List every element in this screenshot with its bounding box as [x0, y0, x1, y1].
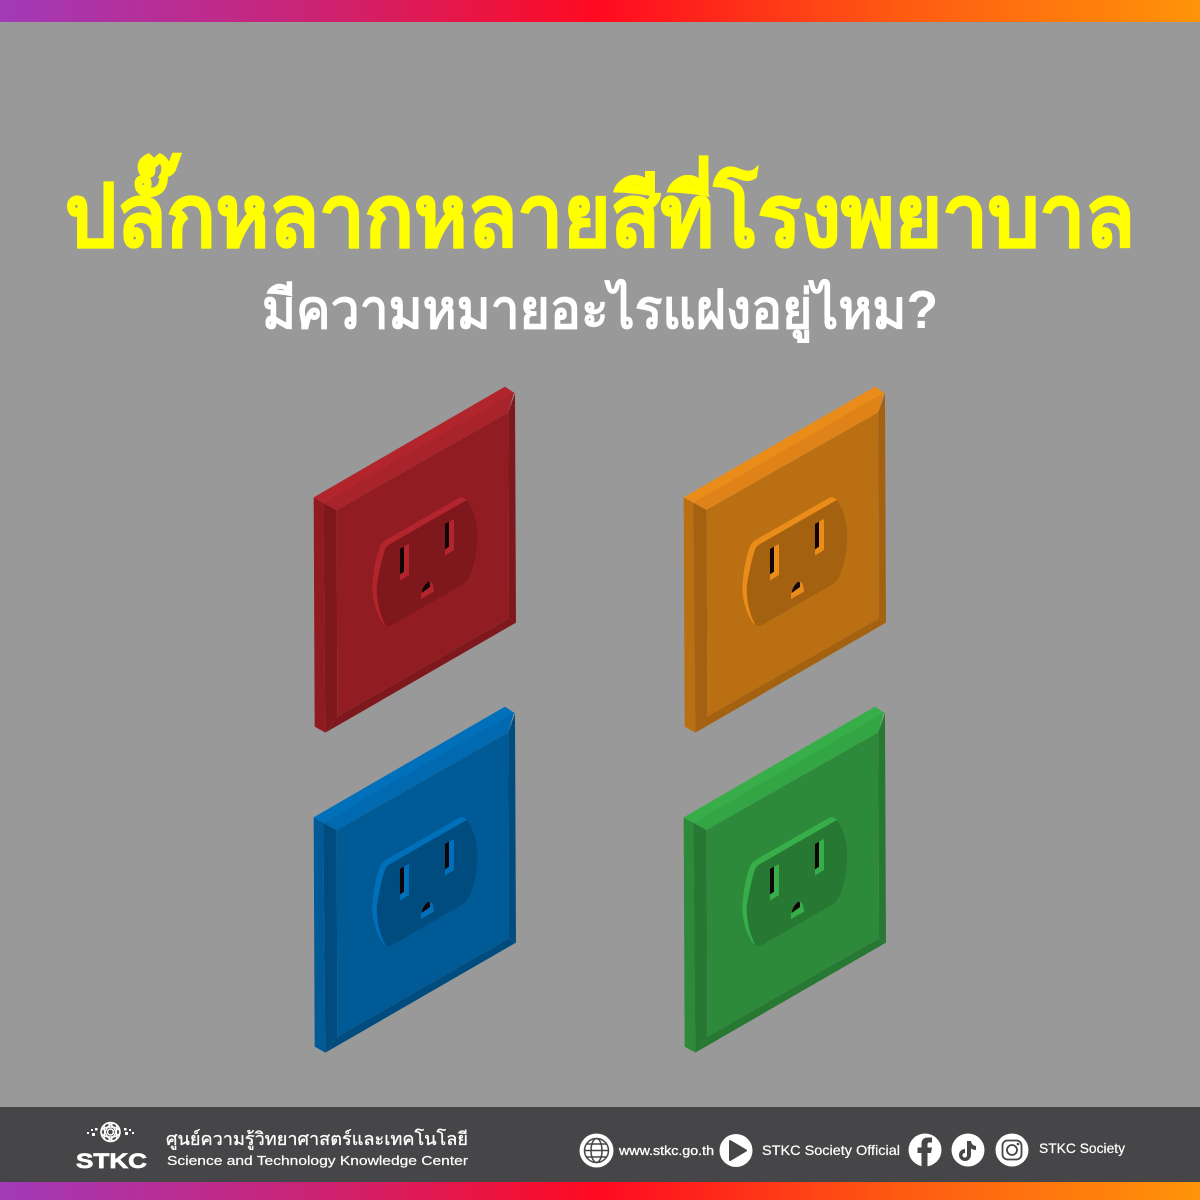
title: ปลั๊กหลากหลายสีที่โรงพยาบาล — [65, 153, 1135, 265]
icon: instagram — [996, 1134, 1028, 1166]
footer organisation name Thai: ศูนย์ความรู้วิทยาศาสตร์และเทคโนโลยี — [166, 1128, 468, 1150]
icon: tiktok — [952, 1134, 984, 1166]
bottom gradient bar — [0, 1182, 1200, 1200]
footer bar — [0, 1107, 1200, 1182]
website text: www.stkc.go.th — [618, 1143, 714, 1158]
subtitle: มีความหมายอะไรแฝงอยู่ไหม? — [262, 278, 938, 343]
top gradient bar — [0, 0, 1200, 22]
footer organisation name English: Science and Technology Knowledge Center — [167, 1153, 469, 1168]
STKC logo: STKC — [76, 1150, 147, 1173]
social handle text: STKC Society — [1039, 1140, 1125, 1156]
icon: play — [720, 1134, 752, 1167]
outlet: orange — [684, 387, 886, 733]
video channel text: STKC Society Official — [762, 1142, 900, 1158]
outlet: blue — [314, 707, 516, 1053]
outlet: red — [314, 387, 516, 733]
outlet: green — [684, 707, 886, 1053]
icon: facebook — [908, 1134, 942, 1166]
STKC logo — [76, 1121, 147, 1173]
icon: globe — [580, 1134, 614, 1168]
